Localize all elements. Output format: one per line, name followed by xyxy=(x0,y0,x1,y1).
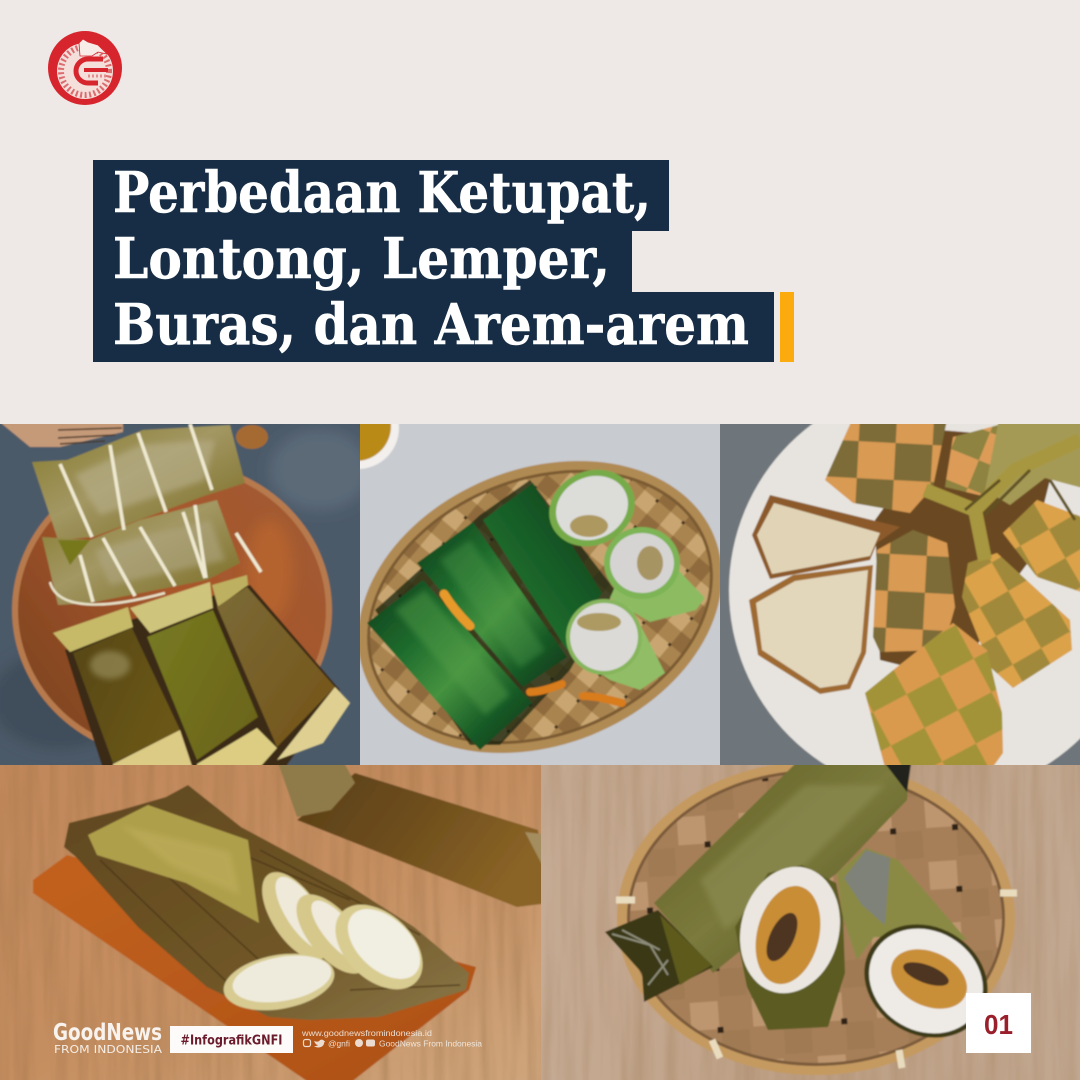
footer: website and social handles: GoodNews From Indonesia xyxy=(379,1038,482,1048)
footer: GoodNews wordmark: GoodNews xyxy=(53,1020,162,1046)
woven ketupat parcels xyxy=(825,420,947,513)
footer: website and social handles xyxy=(301,1028,482,1048)
icon: instagram xyxy=(304,1040,310,1046)
footer: hashtag tag xyxy=(170,1026,293,1053)
cut lemper right xyxy=(604,527,705,622)
knot and leaf stems xyxy=(985,424,1080,506)
photo: arem-arem on wooden board xyxy=(0,755,551,1080)
title text: Perbedaan Ketupat, xyxy=(113,160,651,226)
terracotta plate xyxy=(11,475,333,742)
brown lontong right xyxy=(217,587,335,747)
cut lemper top xyxy=(548,469,636,547)
chili peppers xyxy=(444,594,470,626)
dark lontong left xyxy=(73,628,180,763)
title background band xyxy=(93,160,774,362)
banana leaf xyxy=(64,785,469,1020)
sliced rounds xyxy=(222,871,424,1012)
icon: facebook xyxy=(355,1039,363,1047)
photo: lontong on terracotta plate xyxy=(0,414,370,775)
twisted leaf end xyxy=(605,910,713,1002)
footer: hashtag tag: #InfografikGNFI xyxy=(180,1032,282,1048)
banana wrapped lontong middle xyxy=(42,500,240,605)
title text: Lontong, Lemper, xyxy=(113,226,610,292)
title block xyxy=(93,160,794,362)
shadow under lower rolls xyxy=(65,585,340,775)
tea cup xyxy=(360,424,400,470)
oval bamboo basket xyxy=(360,460,720,754)
round basket xyxy=(617,761,1015,1075)
footer: website and social handles: @gnfi xyxy=(328,1038,350,1048)
photo: lemper in bamboo basket xyxy=(360,424,720,765)
green banana rolls xyxy=(483,483,602,650)
page number box: 01 xyxy=(984,1009,1013,1040)
wooden fork xyxy=(0,424,124,448)
photo: ketupat on white plate xyxy=(720,424,1080,765)
green lontong middle xyxy=(147,610,258,760)
second wrapped roll xyxy=(837,848,967,960)
icon: twitter xyxy=(314,1040,325,1047)
shadow under rolls xyxy=(375,480,615,745)
wood grain xyxy=(0,755,551,1080)
logo: GNFI red emblem xyxy=(48,31,122,105)
cut rice slice upper xyxy=(752,495,900,579)
cut buras left xyxy=(727,856,853,1030)
footer: website and social handles: www.goodnewsfromindonesia.id xyxy=(301,1028,432,1038)
unwrapped arem-arem xyxy=(88,805,259,923)
cut rice slice lower xyxy=(749,565,873,694)
large wrapped roll xyxy=(654,757,910,973)
cut buras right xyxy=(844,902,1008,1060)
footer: GoodNews wordmark xyxy=(53,1020,163,1056)
title text: Buras, dan Arem-arem xyxy=(113,292,749,358)
banana wrapped lontong top xyxy=(32,425,245,540)
shadow between parcels xyxy=(875,430,1060,680)
page number box xyxy=(966,993,1031,1053)
icon: youtube xyxy=(366,1040,375,1046)
wood grain xyxy=(531,755,1080,1080)
accent bar xyxy=(780,292,794,362)
dried flower xyxy=(236,425,268,449)
footer: GoodNews wordmark: FROM INDONESIA xyxy=(54,1044,163,1056)
cut lemper lower xyxy=(566,599,665,690)
wooden cutting board xyxy=(33,855,476,1080)
rice ends and caps xyxy=(53,607,133,652)
photo: buras rolls in round basket xyxy=(531,755,1080,1080)
basket ties xyxy=(616,893,1017,1068)
bamboo strings xyxy=(60,424,261,602)
title text xyxy=(113,160,749,358)
white plate xyxy=(728,424,1080,765)
back wrapped roll xyxy=(276,757,550,907)
